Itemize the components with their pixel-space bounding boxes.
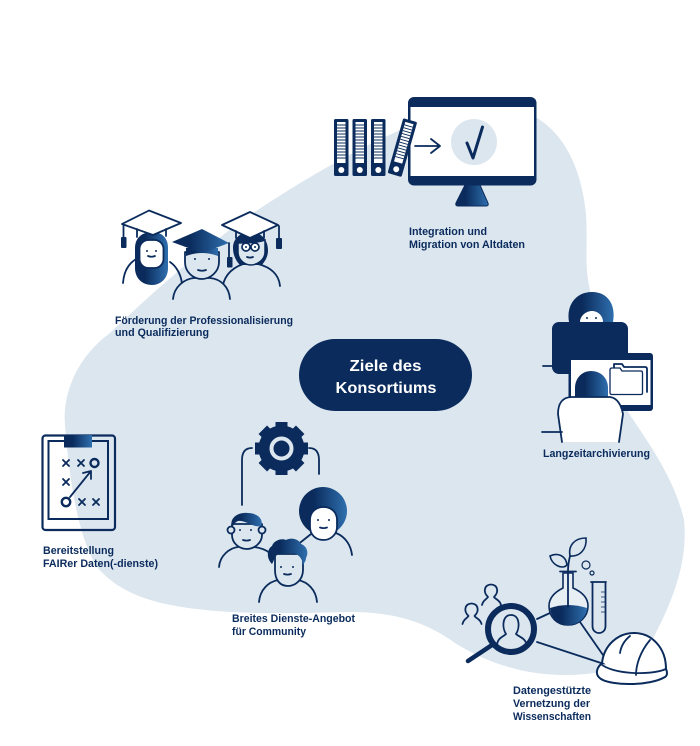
label: Langzeitarchivierung: Langzeitarchivierung — [543, 448, 650, 460]
icon: clipboard — [42, 435, 115, 530]
graduate right — [222, 212, 282, 291]
label: Förderung: und Qualifizierung — [115, 327, 209, 339]
small people — [462, 584, 501, 624]
icon: graduates — [121, 210, 282, 299]
graduate middle — [172, 229, 232, 299]
connector lines — [242, 448, 319, 505]
test tube — [591, 582, 606, 633]
screen with folders — [568, 353, 653, 411]
center pill: Ziele des — [350, 358, 422, 375]
monitor — [408, 97, 536, 206]
person left — [219, 513, 270, 567]
label: Förderung: Förderung der Professionalisierung — [115, 315, 293, 327]
label: integration — [409, 226, 525, 251]
network lines — [537, 613, 603, 663]
label: Breites Dienste-Angebot: Breites Dienste-Angebot — [232, 613, 355, 625]
label: Breites Dienste-Angebot — [232, 613, 355, 638]
label: Datengestützte — [513, 685, 591, 723]
person front — [259, 539, 317, 602]
center pill — [299, 339, 472, 411]
label: integration: Migration von Altdaten — [409, 239, 525, 251]
label: Bereitstellung: Bereitstellung — [43, 545, 114, 557]
person behind desk — [543, 292, 628, 374]
icon: data-driven network — [462, 538, 667, 684]
person with afro — [296, 487, 352, 555]
icon: binders and monitor — [334, 97, 536, 206]
label: Förderung — [115, 315, 293, 339]
label: integration: Integration und — [409, 226, 487, 238]
icon: community with gear — [219, 422, 352, 602]
label: Datengestützte: Datengestützte — [513, 685, 591, 697]
icon: archive workstation — [542, 292, 653, 442]
center pill: Konsortiums — [336, 380, 437, 397]
label: Datengestützte: Wissenschaften — [513, 711, 591, 723]
background blob — [65, 111, 685, 675]
arrow — [415, 139, 440, 153]
graduate left — [121, 210, 182, 285]
flask — [549, 538, 594, 625]
hard hat — [597, 633, 667, 684]
label: Datengestützte: Vernetzung der — [513, 698, 591, 710]
magnifier — [468, 606, 534, 661]
person in front — [542, 371, 623, 442]
label: Bereitstellung: FAIRer Daten(-dienste) — [43, 558, 158, 570]
label: Bereitstellung — [43, 545, 158, 570]
gear — [255, 422, 308, 475]
label: Breites Dienste-Angebot: für Community — [232, 626, 307, 638]
binders — [334, 118, 417, 177]
